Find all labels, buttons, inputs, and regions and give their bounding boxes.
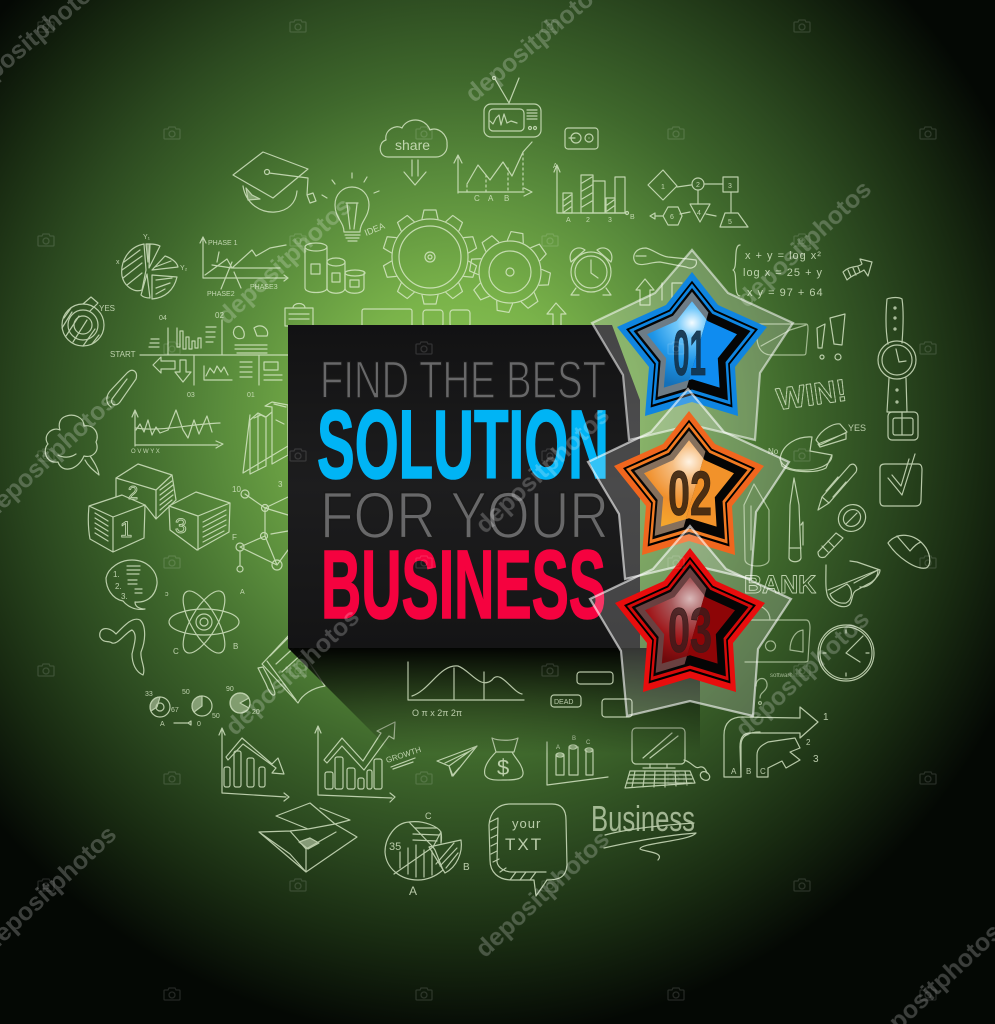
chart: pie with exploded slice: B [463,862,470,873]
icon: three direction arrows: B [746,767,751,776]
text: math formulas: x + y = log x² [745,250,822,262]
icon: paper plane [437,746,477,776]
icon: three direction arrows: C [760,767,766,776]
icon: television [484,76,541,137]
icon: up arrows behind star [636,279,682,310]
badge: star 01 blue [617,272,767,416]
chart: 3D pie with slice [768,423,866,472]
chart: hatched pie: x [116,259,120,266]
icon: atom: ↄ [165,591,169,598]
chart: start timeline row: 02 [215,311,224,320]
diagram: network nodes: F [232,533,237,542]
diagram: network nodes: 3 [278,480,283,489]
watermark text: depositphotos [732,175,877,313]
icon: light bulb: IDEA [363,221,386,238]
chart: three donuts: 50 [212,713,220,720]
doodles partly hidden above the panel [285,303,566,327]
icon: brain speech cloud [45,415,99,475]
text: math formulas [733,245,824,299]
icon: share cloud [380,120,447,185]
panel shadow with long diagonal edge [288,648,700,754]
chart: wavy line chart [131,410,223,455]
chart: bell curves [408,662,524,718]
chart: three donuts: 0 [197,721,201,728]
icon: list speech bubble: 1. [113,570,120,579]
chart: zigzag line chart [454,142,532,203]
chart: pie with exploded slice [385,811,470,898]
text: BANK: BANK [744,571,816,599]
diagram: network nodes [232,480,288,596]
icon: atom: C [173,647,179,656]
chart: hatched bar chart: B [630,214,635,221]
panel: black title board [288,325,640,648]
icon: graduation cap [233,152,316,212]
chart: phase line chart: PHASE 1 [208,240,238,247]
icon: numbered blocks: 3 [175,515,187,538]
chart: falling bars [219,728,289,801]
diagram: flowchart: 2 [696,182,700,189]
icon: numbered blocks: 1 [120,517,132,542]
icon: striped curved arrow [843,259,872,280]
badge: star 01 blue: 01 [673,317,706,389]
diagram: flowchart: 6 [670,214,674,221]
chart: pie with exploded slice: C [425,811,432,821]
watermark text: depositphotos [470,825,615,963]
glass star behind 03 [590,526,791,716]
chart: hatched pie [116,234,188,299]
icon: briefcase [745,605,810,662]
icon: open book and pen [258,632,325,703]
text: Business handwriting [591,798,696,860]
chart: phase line chart: PHASE3 [250,284,278,291]
heading line: SOLUTION: SOLUTION [317,390,609,499]
icon: money bag [485,738,523,780]
icon: large pencil behind star [744,484,769,566]
watermark text: depositphotos [220,603,365,741]
chart: hatched bar chart: 2 [586,217,590,224]
icon: numbered blocks [88,464,230,552]
icon: envelope [757,324,808,355]
chart: hatched bar chart [553,163,635,224]
icon: wrench [634,248,696,268]
icon: atom: B [233,642,238,651]
chart: wavy line chart: O V W Y X [131,449,160,455]
chart: three donuts: 33 [145,691,153,698]
chart: hatched pie: Y₂ [180,265,188,272]
icon: small gear [469,231,551,313]
chart: rising bars: GROWTH [385,745,422,765]
icon: paperclip [107,370,136,407]
glass star behind 01 [592,250,793,440]
chart: three donuts [145,686,260,728]
doodles: bottom row [219,722,711,898]
heading line: FIND THE BEST: FIND THE BEST [320,351,606,410]
icon: desktop computer [625,728,711,788]
icon: three direction arrows: A [731,767,737,776]
chart: 3D pie with slice: YES [848,423,866,433]
chart: small three bars: C [586,740,591,746]
chart: three donuts: 90 [226,686,234,693]
icon: checkbox [880,454,922,506]
text: Business handwriting: Business [591,798,695,839]
diagram: flowchart: 1 [661,184,665,191]
doodles: left side [45,234,365,728]
icon: tablet [362,309,412,327]
watermark text: depositphotos [470,401,615,539]
icon: computer mouse [888,535,930,568]
icon: question mark [756,673,793,704]
icon: spiral arrow: YES [99,304,115,313]
icon: open cardboard box [259,803,357,872]
icon: three direction arrows: 2 [806,738,811,747]
chart: zigzag line chart: A [488,194,494,203]
chart: three donuts: 67 [171,707,179,714]
chart: zigzag line chart: B [504,194,509,203]
chart: start timeline row: 04 [159,315,167,322]
text: math formulas: x y = 97 + 64 [747,287,824,299]
icon: speech bubble your text: TXT [505,835,543,854]
glass star behind 02 [588,389,789,579]
chart: start timeline row [110,311,288,399]
diagram: flowchart: 4 [697,210,701,217]
doodles: top row [233,76,872,313]
icon: cylinder stack [305,243,365,293]
icon: alarm clock [570,248,612,295]
diagram: labelled boxes: DEAD [554,699,573,706]
icon: up arrow [547,303,566,326]
doodles: right side [724,298,930,777]
chart: hatched bar chart: 3 [608,217,612,224]
icon: clipboard [285,304,313,326]
icon: numbered blocks: 2 [128,483,138,503]
icon: smartphone [450,310,470,327]
icon: phone [423,310,443,327]
chart: small three bars [547,736,608,785]
diagram: network nodes: A [240,589,245,596]
diagram: flowchart [648,170,748,227]
chart: start timeline row: 01 [247,392,255,399]
chart: three donuts: 50 [182,689,190,696]
number 02: 02 [668,459,712,529]
icon: spiral arrow [62,297,115,346]
icon: three direction arrows: 1 [823,712,829,723]
icon: atom [165,585,239,659]
chart: bell curves: O π x 2π 2π [412,708,462,718]
icon: speech bubble your text [489,804,567,896]
chart: three donuts: A [160,721,165,728]
icon: diagonal pencil [818,464,857,510]
icon: question mark: software [770,673,793,679]
icon: magnifier [818,499,871,557]
badge: star 03 red [615,548,765,692]
chart: start timeline row: 03 [187,392,195,399]
icon: three direction arrows: 3 [813,754,819,765]
icon: list speech bubble [106,560,157,609]
icon: money bag: $ [497,755,509,780]
icon: wall clock [818,625,874,681]
chart: phase line chart [200,237,288,298]
chart: small three bars: B [572,736,576,742]
watermark text: depositphotos [730,605,875,743]
text: math formulas: log x = 25 + y [743,267,823,279]
icon: list speech bubble: 2. [115,582,122,591]
badge: star 02 orange [614,411,764,555]
icon: ribbon shape number 3 [100,619,145,675]
number 03: 03 [668,596,712,666]
icon: wristwatch [878,298,918,440]
chart: 3D hatched bars [243,402,288,474]
text: WIN: WIN! [774,372,849,417]
icon: three direction arrows [724,707,829,777]
diagram: flowchart: 5 [728,219,732,226]
heading line: FOR YOUR: FOR YOUR [320,478,609,552]
icon: sunglasses [826,561,880,607]
chart: three donuts: 20 [252,709,260,716]
chart: hatched bar chart: A [553,163,558,170]
icon: list speech bubble: 3. [121,592,128,601]
chart: start timeline row: START [110,350,136,359]
icon: light bulb [322,173,386,241]
icon: small gauge box [565,128,598,149]
diagram: flowchart: 3 [728,183,732,190]
chart: pie with exploded slice: A [409,884,417,898]
chart: hatched pie: Y₁ [143,234,151,241]
icon: speech bubble your text: your [512,816,541,831]
chart: zigzag line chart: C [474,194,480,203]
heading line: BUSINESS: BUSINESS [321,530,606,639]
diagram: network nodes: 10 [232,485,241,494]
icon: exclamation marks [817,314,845,360]
icon: vertical pencil [789,478,803,562]
icon: share cloud: share [395,137,430,153]
diagram: labelled boxes [551,672,632,717]
watermark text: depositphotos [212,192,357,330]
chart: pie with exploded slice: 35 [389,841,401,853]
chart: rising bars [315,722,422,802]
chart: 3D pie with slice: No [768,447,779,456]
doodles dimmed by the shadow [408,662,632,718]
chart: hatched bar chart: A [566,217,571,224]
chart: small three bars: A [556,745,560,751]
icon: large gear [383,210,477,304]
chart: phase line chart: PHASE2 [207,291,235,298]
